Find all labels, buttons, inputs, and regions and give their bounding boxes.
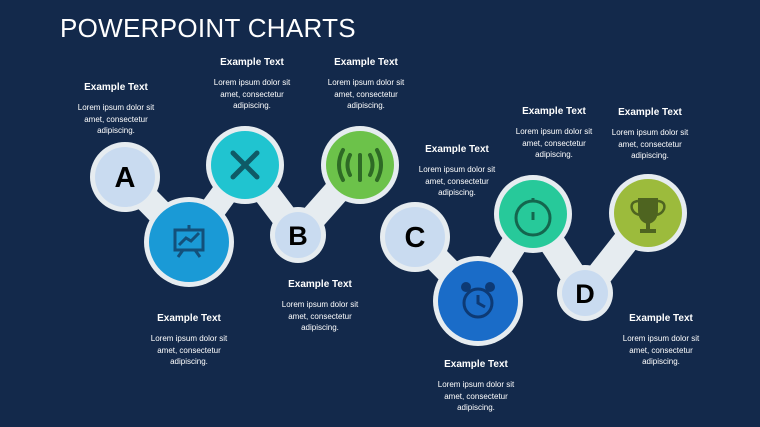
text: A: amet, consectetur [84, 114, 148, 124]
text: B: amet, consectetur [288, 312, 352, 320]
icon circle: alarm clock [433, 256, 523, 346]
title: POWERPOINT CHARTS [60, 13, 356, 43]
text: trophy: Example Text [618, 107, 682, 118]
text: C [419, 144, 496, 197]
text: D: Example Text [629, 313, 693, 324]
text: alarm: Example Text [444, 359, 508, 370]
text: stopwatch: adipiscing. [535, 150, 573, 159]
text: antenna: Lorem ipsum dolor sit [328, 78, 404, 87]
text: B: Lorem ipsum dolor sit [282, 300, 358, 309]
text: A: Lorem ipsum dolor sit [78, 103, 154, 112]
text: tools: Example Text [220, 57, 284, 68]
text: antenna: Example Text [334, 57, 398, 68]
text: C: Example Text [425, 144, 489, 155]
text: B: adipiscing. [301, 323, 339, 332]
text: alarm: amet, consectetur [444, 392, 508, 400]
circle C: C [405, 222, 426, 254]
text: stopwatch: Lorem ipsum dolor sit [516, 127, 592, 136]
text: chart [151, 313, 228, 366]
icon circle: chart [144, 197, 234, 287]
text: B [282, 279, 358, 332]
text: trophy: Lorem ipsum dolor sit [612, 128, 688, 137]
text: C: amet, consectetur [425, 176, 489, 186]
circle A: A [115, 162, 136, 194]
text: stopwatch [516, 106, 592, 159]
text: C: Lorem ipsum dolor sit [419, 165, 495, 174]
text: D: adipiscing. [642, 357, 680, 366]
text: alarm: adipiscing. [457, 403, 495, 412]
text: chart: amet, consectetur [157, 346, 221, 354]
text: C: adipiscing. [438, 188, 476, 197]
circle C [380, 202, 450, 272]
icon circle: stopwatch [494, 175, 572, 253]
text: chart: adipiscing. [170, 357, 208, 366]
text: stopwatch: amet, consectetur [522, 138, 586, 148]
text: D: Lorem ipsum dolor sit [623, 334, 699, 343]
text: B: Example Text [288, 279, 352, 290]
connectors [125, 165, 648, 301]
circle A [90, 142, 160, 212]
text: trophy: amet, consectetur [618, 140, 682, 148]
text: antenna: amet, consectetur [334, 90, 398, 98]
icon circle: tools [206, 126, 284, 204]
text: chart: Example Text [157, 313, 221, 324]
text: chart: Lorem ipsum dolor sit [151, 334, 227, 343]
text: trophy: adipiscing. [631, 151, 669, 160]
text: alarm [438, 359, 514, 412]
circle D: D [575, 279, 595, 309]
text: tools: amet, consectetur [220, 90, 284, 98]
text: antenna: adipiscing. [347, 101, 385, 110]
text: stopwatch: Example Text [522, 106, 586, 117]
text: tools [214, 57, 290, 110]
text: D [623, 313, 700, 366]
text: antenna [328, 57, 404, 110]
text: A: Example Text [84, 82, 148, 93]
text: tools: adipiscing. [233, 101, 271, 110]
text: A: adipiscing. [97, 126, 135, 135]
icon circle: trophy [609, 174, 687, 252]
icon circle: antenna [321, 126, 399, 204]
circle D [557, 265, 613, 321]
text: trophy [612, 107, 688, 160]
circle B [270, 207, 326, 263]
text: A [78, 82, 154, 135]
circle B: B [288, 221, 308, 251]
text: tools: Lorem ipsum dolor sit [214, 78, 290, 87]
text: alarm: Lorem ipsum dolor sit [438, 380, 514, 389]
text: D: amet, consectetur [629, 346, 693, 354]
